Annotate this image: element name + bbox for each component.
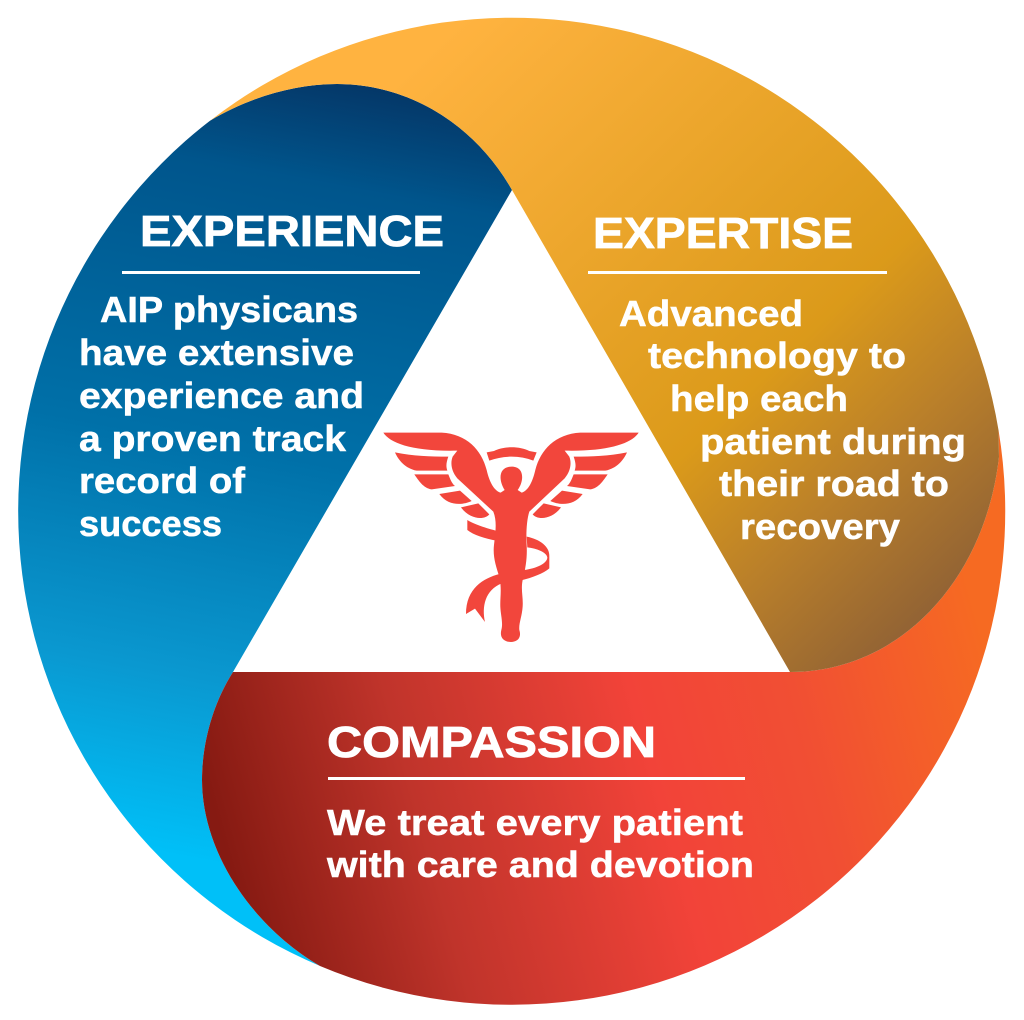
- right wing feathers: [533, 452, 627, 518]
- text block: expertise description: [619, 293, 966, 547]
- text block: experience description: [79, 289, 364, 544]
- heading underline: [328, 777, 745, 780]
- text block: expertise description: patient during: [700, 421, 966, 462]
- text block: expertise description: help each: [670, 378, 848, 419]
- text block: expertise description: technology to: [648, 335, 906, 376]
- heading: experience: EXPERIENCE: [140, 207, 444, 256]
- text block: experience description: have extensive: [79, 332, 354, 373]
- text block: compassion description: with care and devotion: [326, 844, 754, 885]
- heading underline: [588, 271, 887, 274]
- panel: experience: [18, 84, 512, 966]
- heading underline: [122, 271, 420, 274]
- text block: experience description: AIP physicans: [100, 289, 358, 330]
- lower ribbon tail: [466, 574, 502, 622]
- text block: experience description: a proven track: [79, 418, 347, 459]
- panel: expertise: [210, 18, 999, 672]
- text block: expertise description: recovery: [740, 506, 900, 547]
- text block: experience description: success: [79, 503, 222, 544]
- text block: experience description: record of: [79, 460, 246, 501]
- halo ribbon: [487, 447, 537, 461]
- waist ribbon right: [520, 537, 549, 581]
- heading: expertise: EXPERTISE: [593, 209, 853, 258]
- text block: expertise description: their road to: [719, 463, 949, 504]
- figure body and main wings: [383, 433, 639, 642]
- icon: winged caduceus figure: [383, 433, 639, 642]
- panel: compassion: [202, 430, 1005, 1005]
- text block: compassion description: We treat every patient: [327, 802, 743, 843]
- text block: expertise description: Advanced: [619, 293, 803, 334]
- blue swirl segment: [18, 84, 512, 966]
- text block: compassion description: [326, 802, 754, 885]
- orange swirl segment: [210, 18, 999, 672]
- heading: compassion: COMPASSION: [327, 718, 656, 767]
- left wing feathers: [395, 452, 489, 518]
- waist ribbon left: [467, 520, 497, 541]
- text block: experience description: experience and: [79, 375, 364, 416]
- red swirl segment: [202, 430, 1005, 1005]
